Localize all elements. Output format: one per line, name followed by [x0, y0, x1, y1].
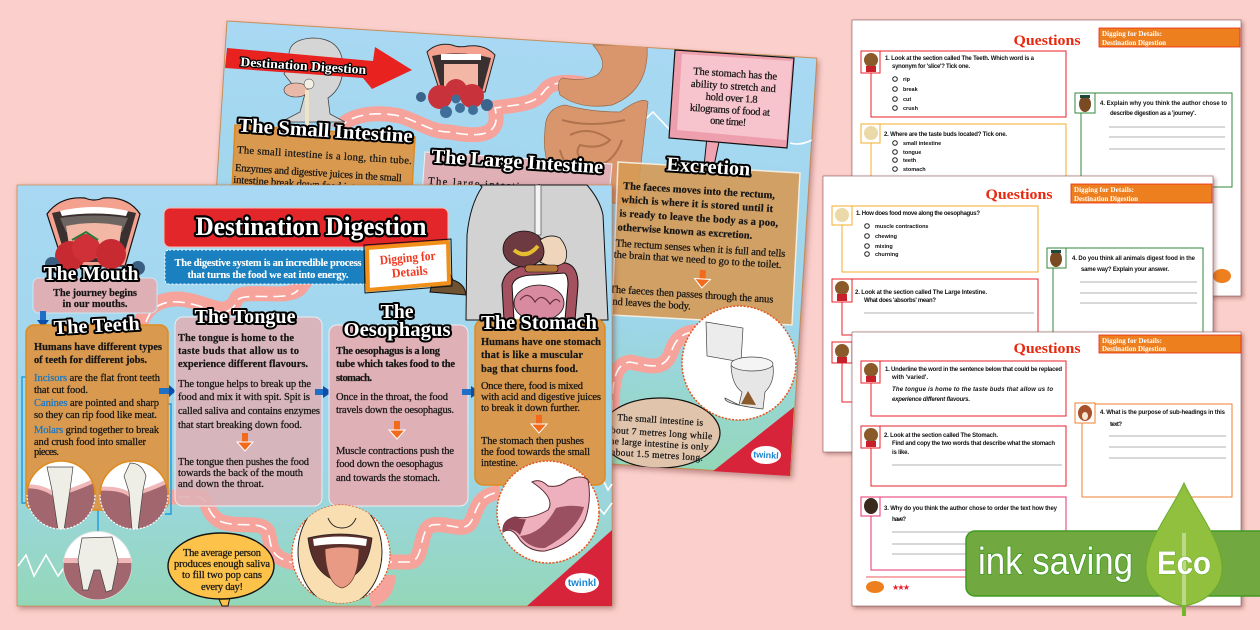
illustration: tooth molar: [60, 532, 135, 600]
illustration: stomach and intestines: [544, 45, 648, 207]
callout: saliva fact: every day!: [201, 582, 243, 593]
road: lower right: [370, 492, 500, 600]
callout: saliva fact: produces enough saliva: [174, 559, 270, 570]
corner triangle: [712, 407, 794, 476]
text: oesophagus body: and towards the stomach.: [336, 473, 440, 484]
question 1: The tongue is home to the taste buds that allow us to: [892, 387, 1053, 393]
illustration: tooth incisor: [26, 460, 96, 530]
question 2: small intestine: [903, 141, 941, 147]
text: ink saving: ink saving: [978, 541, 1133, 583]
road: back lower: [612, 332, 695, 412]
text: teeth types: that cut food.: [34, 385, 88, 396]
heading: The Mouth: The Mouth: [44, 263, 138, 285]
icon: leaf: [1146, 483, 1222, 606]
connector lines: teeth labels: [22, 377, 171, 532]
question 1: with 'varied'.: [891, 375, 928, 381]
question 3: [861, 497, 1066, 570]
text: oesophagus body: Once in the throat, the food: [336, 392, 449, 403]
text: tongue body: called saliva and contains enzymes: [178, 406, 320, 417]
panel: the teeth: [26, 313, 168, 510]
question 1: [832, 206, 1038, 272]
text: teeth intro: Humans have different types: [34, 342, 162, 353]
badge: digging for details: Details: [391, 262, 428, 281]
fact bubble: small intestine length: The small intestine is: [617, 413, 704, 429]
illustration: tooth canine: [99, 460, 169, 530]
panel: intro text: that turns the food we eat into energy.: [188, 270, 349, 281]
arrow: tongue to oesophagus: [315, 386, 332, 398]
header tag: [1099, 335, 1241, 353]
footer line: [866, 576, 1100, 578]
question 1: churning: [875, 252, 899, 258]
question 3: [832, 342, 1038, 402]
text: small intestine body: intestine break down food into smaller: [233, 175, 394, 196]
header tag: [1099, 28, 1240, 47]
sheet: worksheet 1: [852, 20, 1241, 296]
text: oesophagus intro: The oesophagus is a long: [336, 346, 441, 357]
text: stomach body: Once there, food is mixed: [481, 381, 584, 392]
header tag: Digging for Details:: [1074, 186, 1134, 194]
callout: stomach fact: ability to stretch and: [691, 79, 777, 95]
text: tongue body: [178, 379, 320, 490]
text: excretion body: The rectum senses when it is full and tells: [615, 238, 786, 260]
panel: title: [164, 208, 448, 247]
heading: The Teeth: The Teeth: [53, 313, 140, 339]
logo: sheet 1: [1213, 269, 1231, 283]
question 1: cut: [903, 97, 911, 103]
panel: excretion: [608, 153, 800, 325]
question 4: 4. Do you think all animals digest food in the: [1072, 256, 1196, 262]
question 1: experience different flavours.: [892, 397, 970, 403]
question 4: 4. What is the purpose of sub-headings in this: [1100, 410, 1226, 416]
illustration: stomach circle: [497, 461, 599, 563]
question 4: [1075, 403, 1232, 497]
panel: small intestine: [232, 116, 416, 185]
text: excretion body: The faeces then passes through the anus: [609, 284, 774, 306]
text: teeth types: Canines are pointed and sharp: [34, 398, 159, 409]
text: oesophagus body: Muscle contractions push the: [336, 446, 454, 457]
text: mouth body: in our mouths.: [62, 299, 128, 310]
heading: The Small Intestine: The Small Intestine: [237, 115, 414, 147]
question 1: crush: [903, 106, 919, 112]
text: stomach body: [481, 381, 601, 469]
text: oesophagus body: food down the oesophagus: [336, 459, 443, 470]
header tag: [1071, 184, 1212, 203]
badge: digging for details: [364, 239, 466, 295]
text: oesophagus body: [336, 392, 454, 484]
illustration: mouth with berries: [416, 44, 495, 118]
text: small intestine body: Enzymes and digestive juices in the small: [235, 163, 402, 184]
heading: Questions: Questions: [1014, 33, 1081, 49]
text: stomach body: The stomach then pushes: [481, 436, 584, 447]
text: stomach intro: [481, 337, 601, 375]
text: tongue intro: experience different flavours.: [178, 359, 308, 370]
sheet: worksheet 2: [823, 176, 1213, 452]
text: small intestine body: [233, 146, 412, 185]
text: tongue intro: [178, 333, 308, 370]
question 4: 4. Explain why you think the author chose to: [1100, 101, 1227, 107]
text: tongue body: that start breaking down food.: [178, 420, 302, 431]
callout: stomach fact: The stomach has the: [693, 66, 778, 83]
question 2: [861, 426, 1066, 486]
heading: The Oesophagus: The: [380, 301, 414, 323]
poster: front page: [17, 185, 612, 606]
panel: the stomach: [475, 312, 605, 485]
question 1: 1. Look at the section called The Teeth. Which word is a: [885, 56, 1035, 62]
arrow: mouth to teeth: [37, 311, 49, 328]
text: stomach body: to break it down further.: [481, 403, 580, 414]
panel: intro text: The digestive system is an incredible process: [174, 258, 362, 269]
question 4: [1047, 248, 1203, 338]
fact bubble: small intestine length: the large intestine is only: [606, 437, 709, 453]
arrow: down: [531, 415, 547, 433]
logo and stars: [866, 581, 910, 593]
arrow: down: [389, 421, 405, 439]
text: oesophagus intro: [336, 346, 455, 384]
corner triangle: [527, 530, 612, 606]
banner arrow: Destination Digestion: [225, 47, 412, 89]
question 2: What does 'absorbs' mean?: [864, 298, 936, 304]
text: small intestine body: The small intestine is a long, thin tube.: [237, 145, 412, 167]
question 1: [861, 51, 1066, 117]
badge: digging for details: Digging for: [379, 248, 436, 267]
text: oesophagus intro: stomach.: [336, 373, 372, 384]
text: Eco: Eco: [1157, 545, 1211, 581]
logo: twinkl front: twinkl: [568, 578, 596, 589]
text: stomach body: the food towards the small: [481, 447, 590, 458]
fact bubble: small intestine length: about 7 metres long while: [606, 426, 713, 442]
question 2: teeth: [903, 158, 917, 164]
header tag: Destination Digestion: [1102, 39, 1166, 47]
question 2: 2. Look at the section called The Large Intestine.: [855, 290, 987, 296]
text: teeth intro: [34, 342, 162, 366]
text: excretion body: and leaves the body.: [608, 296, 691, 312]
callout: stomach fact: [669, 50, 794, 166]
text: teeth types: [34, 373, 161, 458]
text: stomach body: with acid and digestive juices: [481, 392, 601, 403]
question 2: [861, 124, 1066, 184]
question 4: same way? Explain your answer.: [1081, 267, 1169, 273]
question 1: break: [903, 87, 919, 93]
road: back upper: [338, 82, 600, 135]
heading: Questions: Questions: [1014, 341, 1081, 357]
banner arrow: Destination Digestion: Destination Digestion: [240, 54, 367, 77]
illustration: head silhouette: [281, 38, 345, 126]
panel: large intestine: [422, 148, 612, 185]
heading: The Stomach: The Stomach: [481, 312, 597, 334]
question 4: text?: [1110, 422, 1122, 428]
panel: the oesophagus: [329, 301, 468, 506]
arrow: down: [694, 269, 711, 288]
fact bubble: small intestine length: about 1.5 metres long.: [611, 448, 703, 464]
arrow: teeth to tongue: [159, 385, 176, 397]
callout: saliva fact: The average person: [183, 548, 262, 559]
logo and stars: ★★★: [892, 583, 910, 592]
text: excretion body: the brain that we need to go to the toilet.: [613, 250, 782, 271]
panel: the mouth: [33, 263, 157, 313]
text: tongue body: food and mix it with spit. Spit is: [178, 392, 310, 403]
question 2: 2. Where are the taste buds located? Tick one.: [884, 132, 1007, 138]
text: teeth types: Incisors are the flat front teeth: [34, 373, 161, 384]
heading: The Tongue: The Tongue: [194, 306, 296, 328]
question 2: 2. Look at the section called The Stomach.: [884, 433, 998, 439]
heading: The Oesophagus: Oesophagus: [344, 319, 451, 341]
text: stomach intro: that is like a muscular: [481, 350, 583, 361]
question 2: is like.: [892, 450, 909, 456]
arrow: oesophagus to stomach: [462, 386, 480, 398]
question 2: stomach: [903, 167, 926, 173]
text: stomach intro: Humans have one stomach: [481, 337, 601, 348]
poster: back page: [201, 21, 817, 476]
question 2: [832, 279, 1038, 335]
panel: intro text: [165, 250, 370, 284]
text: excretion body: which is where it is stored until it: [621, 195, 774, 215]
panel: the tongue: [175, 306, 322, 506]
callout: stomach fact: one time!: [710, 116, 746, 129]
eco badge: [966, 483, 1260, 616]
text: teeth intro: of teeth for different jobs.: [34, 355, 147, 366]
text: tongue body: The tongue helps to break up the: [178, 379, 311, 390]
road: upper: [140, 280, 306, 325]
arrow: down: [237, 433, 253, 451]
text: tongue intro: The tongue is home to the: [178, 333, 294, 344]
text: excretion body: is ready to leave the body as a poo,: [619, 208, 779, 229]
question 1: chewing: [875, 234, 897, 240]
text: mouth body: [53, 288, 137, 310]
panel: title: Destination Digestion: [196, 212, 427, 241]
zigzag decoration: [18, 480, 612, 576]
text: teeth types: and crush food into smaller: [34, 437, 146, 448]
text: teeth types: pieces.: [34, 447, 59, 458]
text: large intestine body: The large intestine is the final: [428, 176, 598, 198]
leaf stem: [1182, 533, 1186, 616]
fact bubble: small intestine length: [600, 398, 720, 468]
callout: stomach fact: hold over 1.8: [705, 92, 758, 106]
question 2: tongue: [903, 150, 921, 156]
question 1: mixing: [875, 244, 893, 250]
text: excretion body: The faeces moves into the rectum,: [623, 181, 776, 202]
text: mouth body: The journey begins: [53, 288, 137, 299]
question 2: Find and copy the two words that describe what the stomach: [892, 441, 1055, 447]
callout: saliva fact: [168, 533, 274, 606]
text: teeth types: Molars grind together to break: [34, 425, 160, 436]
callout: saliva fact: to fill two pop cans: [182, 570, 262, 581]
text: tongue body: The tongue then pushes the food: [178, 457, 310, 468]
header tag: Destination Digestion: [1102, 345, 1166, 353]
question 1: synonym for 'slice'? Tick one.: [892, 64, 970, 70]
heading: The Large Intestine: The Large Intestine: [431, 146, 604, 178]
logo: twinkl back: [751, 446, 781, 464]
banner: [966, 531, 1260, 596]
question 1: muscle contractions: [875, 224, 928, 230]
road: lower left: [165, 497, 295, 563]
text: tongue intro: taste buds that allow us to: [178, 346, 299, 357]
text: tongue body: and down the throat.: [178, 479, 264, 490]
heading: The Oesophagus: [344, 301, 451, 341]
text: teeth types: so they can rip food like meat.: [34, 410, 157, 421]
question 3: 3. Why do you think the author chose to order the text how they: [884, 506, 1058, 512]
heading: Excretion: Excretion: [666, 153, 751, 181]
illustration: tongue face: [292, 498, 390, 606]
question 3: have?: [892, 517, 906, 523]
logo: twinkl back: twinkl: [753, 449, 779, 461]
zigzag decoration: [640, 112, 812, 144]
text: tongue body: towards the back of the mouth: [178, 468, 304, 479]
sheet: worksheet 3: [852, 332, 1241, 606]
callout: stomach fact: kilograms of food at: [690, 103, 770, 119]
text: oesophagus body: travels down the oesophagus.: [336, 405, 454, 416]
illustration: mouth: [45, 198, 145, 275]
text: excretion body: otherwise known as excretion.: [617, 222, 753, 242]
illustration: torso with organs: [466, 185, 608, 321]
illustration: toilet circle: [682, 306, 796, 420]
text: excretion body: [612, 182, 785, 312]
heading: Questions: Questions: [986, 187, 1053, 203]
question 1: 1. How does food move along the oesophagus?: [856, 211, 980, 217]
text: oesophagus intro: tube which takes food to the: [336, 359, 455, 370]
question 1: [861, 361, 1066, 416]
text: stomach body: intestine.: [481, 458, 518, 469]
question 4: describe digestion as a 'journey'.: [1110, 111, 1196, 117]
header tag: Digging for Details:: [1102, 30, 1162, 38]
header tag: Digging for Details:: [1102, 337, 1162, 345]
text: stomach intro: bag that churns food.: [481, 364, 578, 375]
question 1: rip: [903, 77, 911, 83]
header tag: Destination Digestion: [1074, 195, 1138, 203]
question 1: 1. Underline the word in the sentence below that could be replaced: [885, 367, 1062, 373]
logo: twinkl front: [565, 573, 599, 593]
question 4: [1075, 93, 1232, 187]
